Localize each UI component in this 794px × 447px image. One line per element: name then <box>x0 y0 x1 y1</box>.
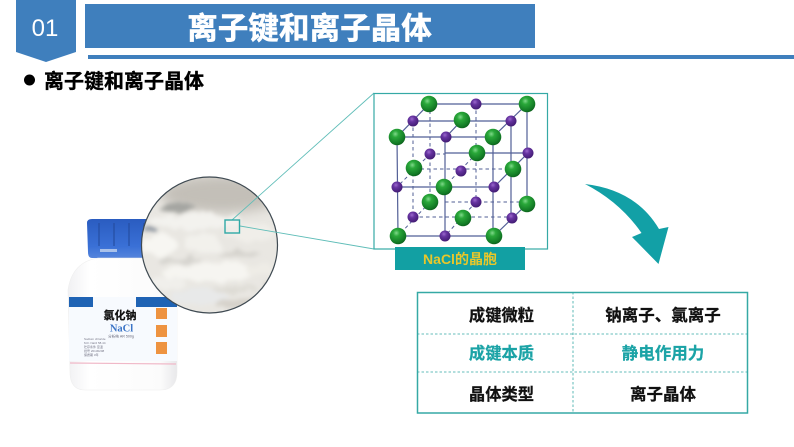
bottle body <box>68 258 177 390</box>
summary table <box>417 292 748 413</box>
bottle cap <box>87 219 155 258</box>
bottle label: NaCl <box>110 324 133 334</box>
crystal caption <box>395 247 525 270</box>
row: bonding particles <box>469 305 721 325</box>
title banner <box>85 4 535 48</box>
zoom guide lines <box>232 93 374 249</box>
magnified salt powder circle <box>140 175 284 316</box>
icon: NaCl reagent bottle <box>68 219 177 390</box>
section number tab: 01 <box>32 15 58 42</box>
solid bonds <box>397 104 528 236</box>
row: bond nature: 成键本质 <box>469 344 534 363</box>
row: crystal type <box>469 384 696 404</box>
subheading with bullet: 离子键和离子晶体 <box>44 69 204 93</box>
row: bonding particles: 成键微粒 <box>469 306 534 325</box>
row: bond nature: 静电作用力 <box>622 344 704 363</box>
title banner: 离子键和离子晶体 <box>187 12 432 46</box>
bottle label: Sodium chloride <box>84 337 106 341</box>
section number tab <box>16 0 76 62</box>
NaCl unit cell diagram <box>389 96 535 244</box>
bottle label: M.F. NaCl 58.44 <box>84 341 106 345</box>
bottle label: 分析纯 AR 500g <box>108 334 134 338</box>
row: crystal type: 晶体类型 <box>469 386 534 404</box>
crystal caption: NaCl的晶胞 <box>423 251 497 267</box>
row: crystal type: 离子晶体 <box>630 384 696 404</box>
row: bonding particles: 钠离子、氯离子 <box>605 305 721 325</box>
crystal frame <box>374 94 548 249</box>
header rule <box>88 55 794 59</box>
bottle label <box>69 297 177 364</box>
bottle label: 保质期 3年 <box>84 352 99 357</box>
chloride atoms (green) <box>389 96 535 244</box>
zoom marker square <box>225 220 240 233</box>
arrow <box>585 184 668 264</box>
bottle label: 批号 20130208 <box>84 348 105 353</box>
row: bond nature <box>469 344 704 363</box>
bottle label: 氯化钠 <box>104 308 136 322</box>
dashed bonds <box>397 104 527 236</box>
sodium atoms (purple) <box>392 98 534 242</box>
bottle label: 贮存条件 室温 <box>84 344 103 349</box>
